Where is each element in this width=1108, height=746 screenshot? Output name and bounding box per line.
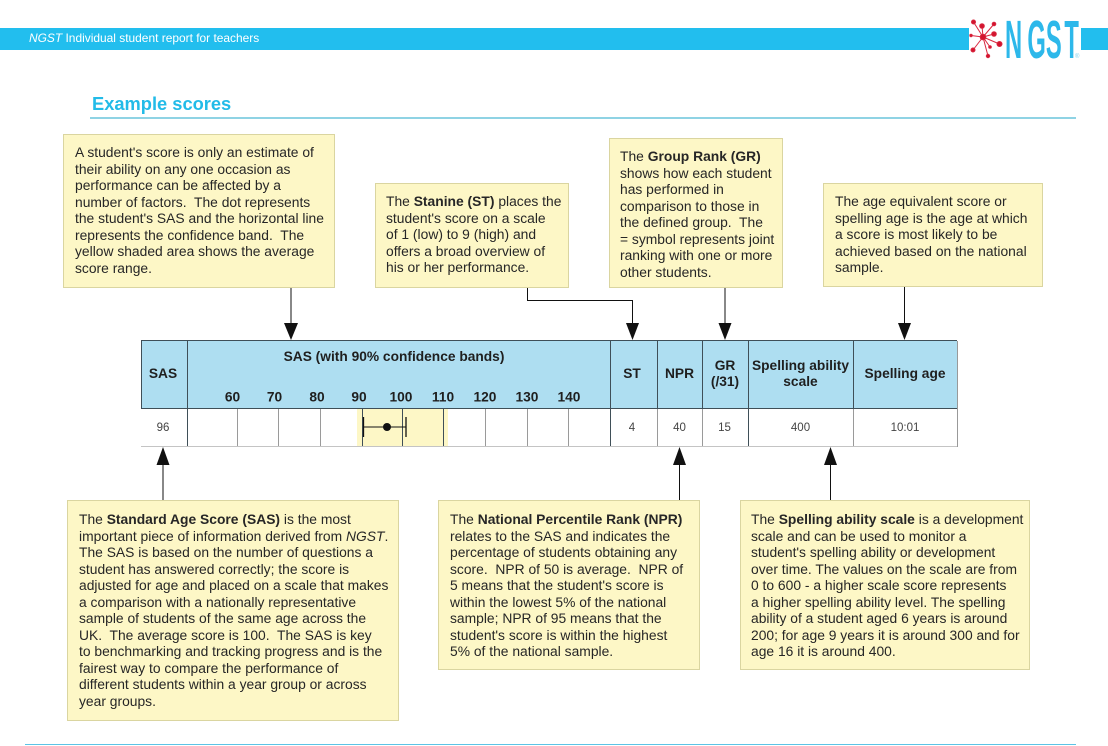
table header labels: 120 bbox=[474, 390, 497, 404]
table header labels: 110 bbox=[432, 390, 454, 404]
table header labels: Spelling ability bbox=[752, 358, 849, 373]
callout: spelling age bbox=[823, 183, 1043, 287]
table header labels: GR bbox=[715, 358, 735, 373]
table header labels bbox=[149, 349, 946, 404]
table header labels: 140 bbox=[558, 390, 581, 404]
table header background bbox=[141, 341, 957, 408]
table header labels: 60 bbox=[225, 390, 240, 404]
table values: 10:01 bbox=[891, 422, 919, 434]
table values: 4 bbox=[629, 422, 636, 434]
table header labels: 100 bbox=[390, 390, 413, 404]
table header labels: 130 bbox=[516, 390, 539, 404]
table header labels: Spelling age bbox=[864, 366, 946, 381]
arrow: spelling ability scale bbox=[824, 447, 837, 500]
callout: confidence band: A student's score is only an estimate of their ability on any one occasion as performance can be affected by a number of factors. The dot represents the student's SAS and the horizontal line represents the confidence band. The yellow shaded area shows the average score range. bbox=[75, 144, 324, 276]
header title: NGST Individual student report for teachers bbox=[29, 31, 259, 45]
arrow: spelling age bbox=[898, 287, 911, 340]
callout: national percentile rank: The National Percentile Rank (NPR) relates to the SAS and indicates the percentage of students obtaining any score. NPR of 50 is average. NPR of 5 means that the student's score is within the lowest 5% of the national sample; NPR of 95 means that the student's score is within the highest 5% of the national sample. bbox=[450, 511, 683, 659]
table header labels: 90 bbox=[351, 390, 367, 404]
table header labels: SAS (with 90% confidence bands) bbox=[284, 349, 504, 364]
table values: 400 bbox=[791, 422, 810, 434]
arrow: NPR bbox=[673, 447, 686, 500]
callout: standard age score: The Standard Age Score (SAS) is the most important piece of information derived from NGST. The SAS is based on the number of questions a student has answered correctly; the score is adjusted for age and placed on a scale that makes a comparison with a nationally representative sample of students of the same age across the UK. The average score is 100. The SAS is key to benchmarking and tracking progress and is the fairest way to compare the performance of different students within a year group or across year groups. bbox=[79, 511, 388, 709]
callout: spelling ability scale: The Spelling ability scale is a development scale and can be used to monitor a student's spelling ability or development over time. The values on the scale are from 0 to 600 - a higher scale score represents a higher spelling ability level. The spelling ability of a student aged 6 years is around 200; for age 9 years it is around 300 and for age 16 it is around 400. bbox=[751, 511, 1023, 659]
table header labels: (/31) bbox=[711, 374, 739, 389]
heading: Example scores: Example scores bbox=[92, 93, 231, 114]
table values bbox=[157, 422, 919, 434]
arrow: group rank bbox=[718, 288, 732, 340]
callout: stanine: The Stanine (ST) places the student's score on a scale of 1 (low) to 9 (high) and offers a broad overview of his or her performance. bbox=[386, 193, 561, 275]
callout: spelling age: The age equivalent score or spelling age is the age at which a score is most likely to be achieved based on the national sample. bbox=[835, 193, 1027, 275]
yellow average range bbox=[357, 408, 448, 446]
arrow: stanine bbox=[528, 288, 639, 340]
header bar bbox=[0, 28, 1108, 50]
table header labels: NPR bbox=[665, 366, 694, 381]
table values: 40 bbox=[673, 422, 686, 434]
arrow: SAS bbox=[156, 447, 170, 500]
footer rule bbox=[25, 744, 1076, 745]
arrow: confidence band bbox=[284, 288, 298, 340]
table header labels: 70 bbox=[267, 390, 282, 404]
logo: NGST: ® bbox=[1075, 53, 1080, 60]
table header labels: 80 bbox=[309, 390, 325, 404]
heading rule bbox=[90, 117, 1076, 119]
table header labels: scale bbox=[783, 374, 818, 389]
callout: group rank: The Group Rank (GR) shows how each student has performed in comparison to those in the defined group. The = symbol represents joint ranking with one or more other students. bbox=[620, 148, 774, 280]
logo: NGST bbox=[969, 12, 1081, 64]
table header labels: ST bbox=[623, 366, 641, 381]
table values: 96 bbox=[157, 422, 169, 434]
table header labels: SAS bbox=[149, 366, 177, 381]
confidence band marker bbox=[364, 417, 406, 437]
table values: 15 bbox=[718, 422, 731, 434]
